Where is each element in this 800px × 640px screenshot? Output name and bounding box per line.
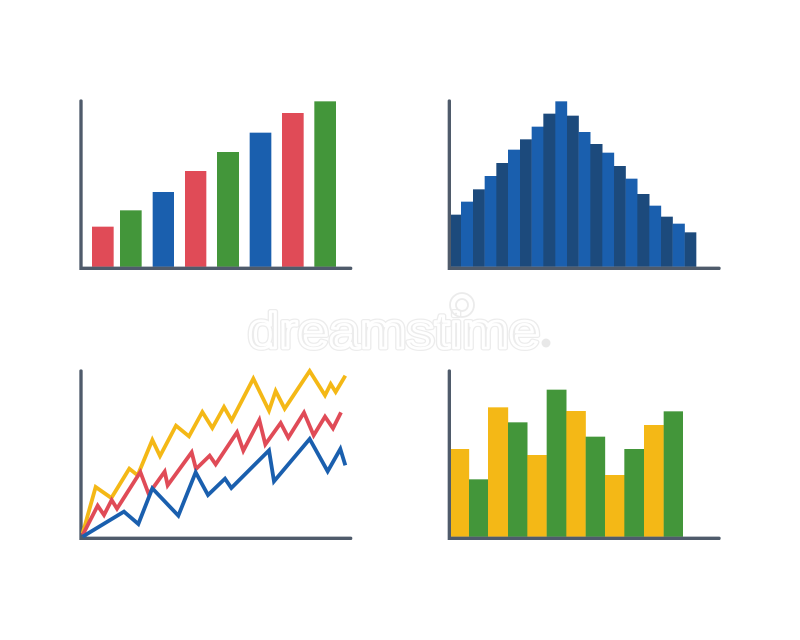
bars <box>449 101 696 267</box>
line: red series <box>83 412 341 535</box>
panel: line chart <box>81 371 351 538</box>
axes <box>81 371 351 538</box>
panel: bell-shaped histogram <box>449 101 719 268</box>
bars <box>450 390 683 537</box>
watermark: dreamstime <box>248 303 540 359</box>
axes <box>449 101 719 268</box>
bars <box>92 101 336 267</box>
axes <box>81 101 351 268</box>
line: yellow series <box>83 371 345 533</box>
panel: yellow and green bar chart <box>449 371 719 538</box>
watermark: dreamstime <box>248 303 540 359</box>
line: blue series <box>83 439 345 537</box>
axes <box>449 371 719 538</box>
panel: rising bar chart <box>81 101 351 268</box>
